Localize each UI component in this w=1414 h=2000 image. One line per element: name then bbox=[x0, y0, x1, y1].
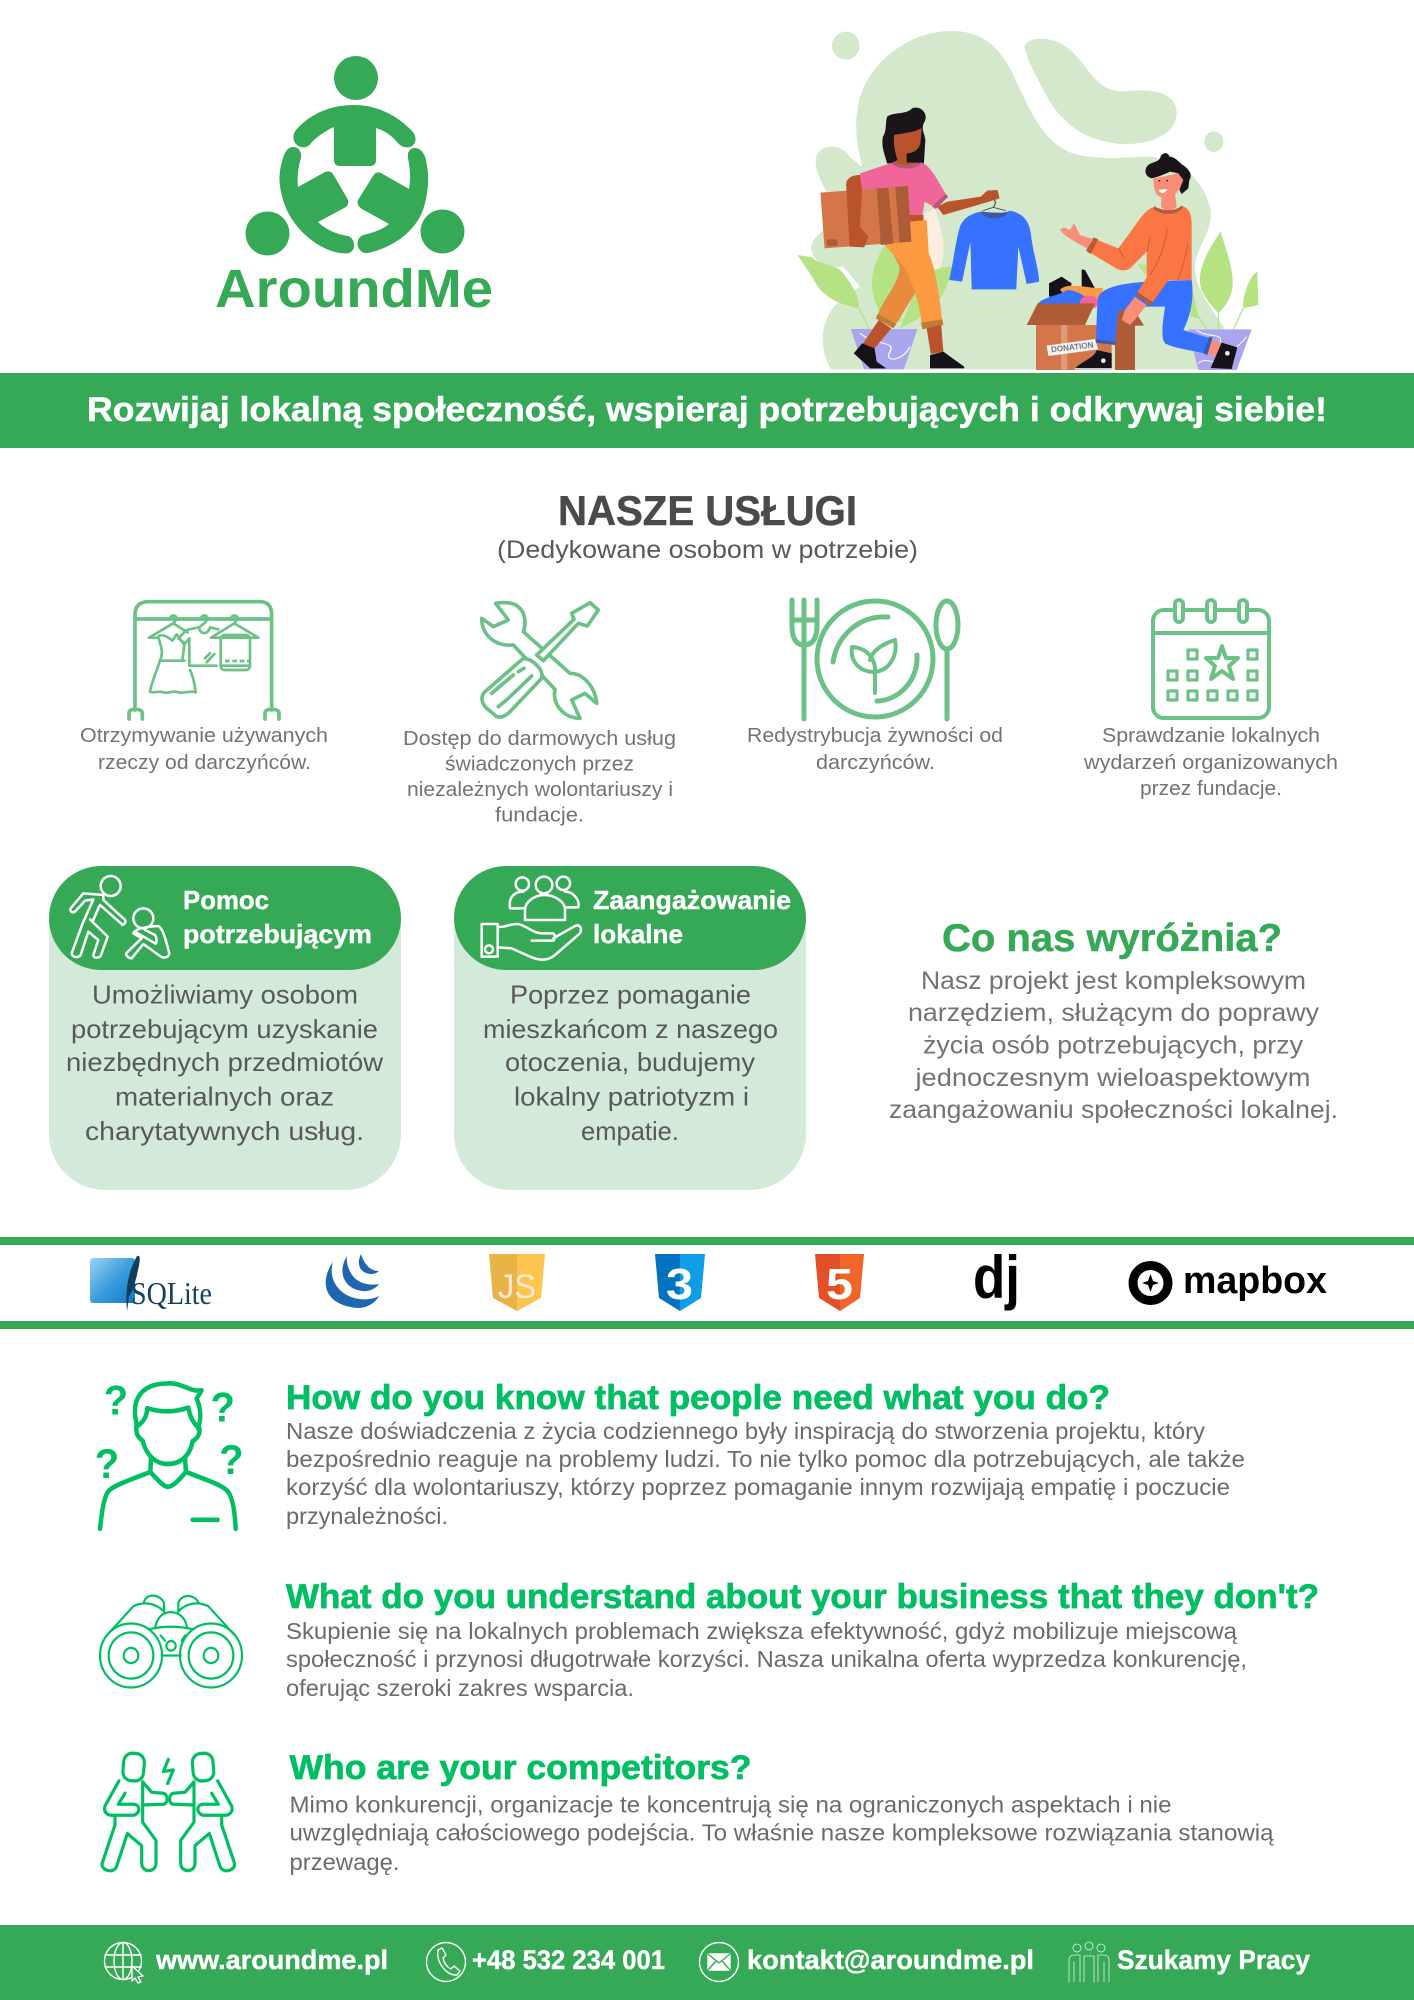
section text bbox=[286, 1418, 1245, 1529]
text block: what sets us apart bbox=[889, 917, 1338, 1124]
icon: questioning person: ? bbox=[219, 1436, 244, 1483]
section heading: Who are your competitors? bbox=[290, 1749, 752, 1787]
tagline: Rozwijaj lokalną społeczność, wspieraj potrzebujących i odkrywaj siebie! bbox=[87, 391, 1327, 429]
caption: rzeczy od darczyńców. bbox=[98, 752, 311, 774]
panel header: potrzebującym bbox=[183, 919, 372, 949]
section text: społeczność i przynosi długotrwałe korzyści. Nasza unikalna oferta wyprzedza konkurencję, bbox=[286, 1646, 1247, 1672]
service: food redistribution bbox=[747, 600, 1003, 774]
section heading: How do you know that people need what you do? bbox=[286, 1379, 1110, 1417]
panel: local engagement bbox=[454, 866, 806, 1190]
caption bbox=[747, 725, 1003, 774]
logo: HTML5: 5 bbox=[826, 1260, 853, 1309]
icon: helper and sitting person bbox=[70, 876, 169, 958]
section text: Mimo konkurencji, organizacje te koncentrują się na ograniczonych aspektach i nie bbox=[290, 1792, 1172, 1818]
website: www.aroundme.pl bbox=[155, 1945, 388, 1975]
description bbox=[889, 967, 1338, 1124]
caption bbox=[80, 725, 328, 774]
description: życia osób potrzebujących, przy bbox=[923, 1032, 1304, 1060]
phone number: +48 532 234 001 bbox=[472, 1945, 665, 1975]
panel text: materialnych oraz bbox=[115, 1082, 334, 1112]
section text bbox=[286, 1618, 1247, 1701]
logo: Django: dj bbox=[973, 1244, 1020, 1311]
woman carrying box bbox=[820, 108, 1000, 368]
section text: Nasze doświadczenia z życia codziennego były inspiracją do stworzenia projektu, który bbox=[286, 1418, 1206, 1444]
text block: what sets us apart: Co nas wyróżnia? bbox=[942, 917, 1282, 960]
section text: korzyść dla wolontariuszy, którzy poprzez pomaganie innym rozwijają empatię i poczucie bbox=[286, 1474, 1230, 1500]
section text: przynależności. bbox=[286, 1503, 448, 1529]
icon: plate with sprout, fork and spoon bbox=[792, 600, 958, 719]
panel header: lokalne bbox=[593, 919, 683, 949]
panel text: lokalny patriotyzm i bbox=[514, 1082, 749, 1112]
technology strip bbox=[0, 1237, 1414, 1329]
panel text: Poprzez pomaganie bbox=[510, 980, 751, 1010]
icon: job seekers bbox=[1069, 1942, 1109, 1982]
logo: SQLite: SQLite bbox=[131, 1275, 212, 1311]
icon: calendar bbox=[1153, 600, 1269, 718]
blue sweater on hanger bbox=[949, 200, 1039, 289]
section text: Skupienie się na lokalnych problemach zwiększa efektywność, gdyż mobilizuje miejscową bbox=[286, 1618, 1237, 1644]
caption: świadczonych przez bbox=[445, 754, 634, 776]
icon: two figures confronting bbox=[102, 1752, 235, 1871]
icon: questioning person: ? bbox=[95, 1441, 119, 1487]
section heading: What do you understand about your business that they don't? bbox=[286, 1578, 1319, 1616]
icon: questioning person bbox=[95, 1377, 244, 1529]
caption bbox=[1083, 725, 1338, 800]
right plant pot bbox=[1188, 329, 1252, 370]
panel title: Zaangażowanie bbox=[593, 885, 791, 915]
caption: przez fundacje. bbox=[1140, 778, 1282, 800]
icon: wrench and screwdriver bbox=[482, 603, 598, 718]
panel text: charytatywnych usług. bbox=[85, 1116, 364, 1146]
icon: questioning person: ? bbox=[210, 1384, 235, 1430]
panel text: niezbędnych przedmiotów bbox=[66, 1047, 383, 1077]
panel text bbox=[66, 980, 383, 1146]
email: kontakt@aroundme.pl bbox=[747, 1945, 1034, 1975]
right plant bbox=[1137, 232, 1258, 318]
caption: Dostęp do darmowych usług bbox=[403, 728, 676, 750]
caption: wydarzeń organizowanych bbox=[1083, 752, 1338, 774]
description: jednoczesnym wieloaspektowym bbox=[914, 1064, 1310, 1092]
icon: clothes rack bbox=[129, 602, 279, 719]
logo: Mapbox bbox=[1128, 1260, 1327, 1305]
panel header bbox=[454, 866, 806, 970]
panel text: otoczenia, budujemy bbox=[505, 1047, 755, 1077]
section: competitors bbox=[102, 1749, 1274, 1875]
service: free services bbox=[403, 603, 676, 826]
cream shape bbox=[925, 208, 944, 270]
caption: darczyńców. bbox=[816, 752, 935, 774]
icon: phone bbox=[426, 1942, 466, 1982]
illustration: volunteers sorting donated clothes bbox=[798, 31, 1258, 370]
section text: bezpośrednio reaguje na problemy ludzi. To nie tylko pomoc dla potrzebujących, ale także bbox=[286, 1446, 1245, 1472]
panel text: mieszkańcom z naszego bbox=[483, 1014, 778, 1044]
icon: community in hand bbox=[482, 877, 581, 960]
logo: Mapbox: mapbox bbox=[1183, 1260, 1327, 1302]
section text: przewagę. bbox=[290, 1849, 400, 1875]
box label: DONATION bbox=[1050, 340, 1094, 354]
description: Nasz projekt jest kompleksowym bbox=[921, 967, 1306, 995]
caption: Redystrybucja żywności od bbox=[747, 725, 1003, 747]
left plant bbox=[798, 245, 952, 328]
panel: help for people in need bbox=[49, 866, 401, 1190]
panel text: potrzebującym uzyskanie bbox=[71, 1014, 378, 1044]
service: local events bbox=[1083, 600, 1338, 800]
left part: blobs, plant and woman bbox=[798, 31, 1231, 369]
logo mark bbox=[246, 56, 464, 256]
logo wordmark: AroundMe bbox=[215, 259, 493, 319]
logo: CSS3 bbox=[655, 1254, 705, 1311]
logo: JavaScript bbox=[489, 1254, 545, 1311]
heading: services bbox=[497, 487, 918, 564]
man sitting on box bbox=[1060, 153, 1237, 370]
icon: binoculars bbox=[100, 1596, 242, 1688]
background blobs bbox=[811, 31, 1231, 369]
donation box bbox=[1027, 269, 1144, 370]
panel text bbox=[483, 980, 778, 1146]
panel text: Umożliwiamy osobom bbox=[92, 980, 358, 1010]
icon: globe with cursor bbox=[104, 1942, 143, 1983]
section: customer need bbox=[95, 1377, 1245, 1529]
logo: CSS3: 3 bbox=[666, 1260, 693, 1309]
tagline band bbox=[0, 373, 1414, 448]
description: narzędziem, służącym do poprawy bbox=[908, 999, 1320, 1027]
caption: Otrzymywanie używanych bbox=[80, 725, 328, 747]
right part: box, man and plant bbox=[1027, 153, 1258, 370]
description: zaangażowaniu społeczności lokalnej. bbox=[889, 1096, 1338, 1124]
panel text: empatie. bbox=[581, 1116, 679, 1146]
panel title: Pomoc bbox=[183, 885, 269, 915]
section text: uwzględniają całościowego podejścia. To właśnie nasze kompleksowe rozwiązania stanowią bbox=[290, 1820, 1274, 1846]
section text: oferując szeroki zakres wsparcia. bbox=[286, 1675, 634, 1701]
caption: Sprawdzanie lokalnych bbox=[1102, 725, 1320, 747]
section: business understanding bbox=[100, 1578, 1319, 1701]
logo: JavaScript: JS bbox=[498, 1268, 536, 1306]
caption: niezależnych wolontariuszy i bbox=[407, 779, 673, 801]
logo: AroundMe bbox=[215, 56, 493, 319]
logo: HTML5 bbox=[815, 1254, 864, 1311]
job link: Szukamy Pracy bbox=[1117, 1945, 1310, 1975]
logo: jQuery bbox=[326, 1254, 379, 1308]
footer band bbox=[0, 1925, 1414, 2000]
caption bbox=[403, 728, 676, 826]
left plant pot bbox=[851, 329, 918, 369]
heading: services: NASZE USŁUGI bbox=[558, 487, 857, 534]
logo: SQLite bbox=[90, 1256, 212, 1311]
service: used items bbox=[80, 602, 328, 774]
icon: mail bbox=[700, 1942, 738, 1982]
subheading: (Dedykowane osobom w potrzebie) bbox=[497, 536, 918, 564]
section text bbox=[290, 1792, 1274, 1875]
icon: questioning person: ? bbox=[104, 1377, 128, 1424]
caption: fundacje. bbox=[495, 804, 584, 826]
panel header bbox=[49, 866, 401, 970]
